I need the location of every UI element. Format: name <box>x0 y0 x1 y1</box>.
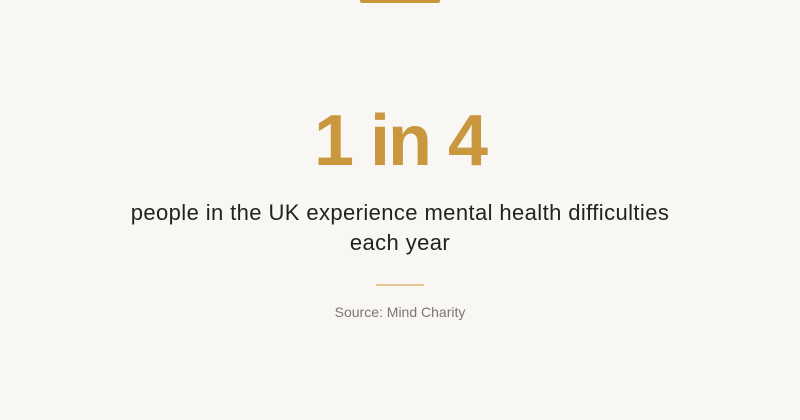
source: Source: Mind Charity <box>335 304 465 320</box>
description text: people in the UK experience mental health difficulties <box>131 200 669 225</box>
divider <box>376 284 424 286</box>
headline statistic: 1 in 4 <box>314 101 486 181</box>
description text: each year <box>350 230 450 255</box>
description text <box>131 200 669 255</box>
top accent bar <box>360 0 440 3</box>
